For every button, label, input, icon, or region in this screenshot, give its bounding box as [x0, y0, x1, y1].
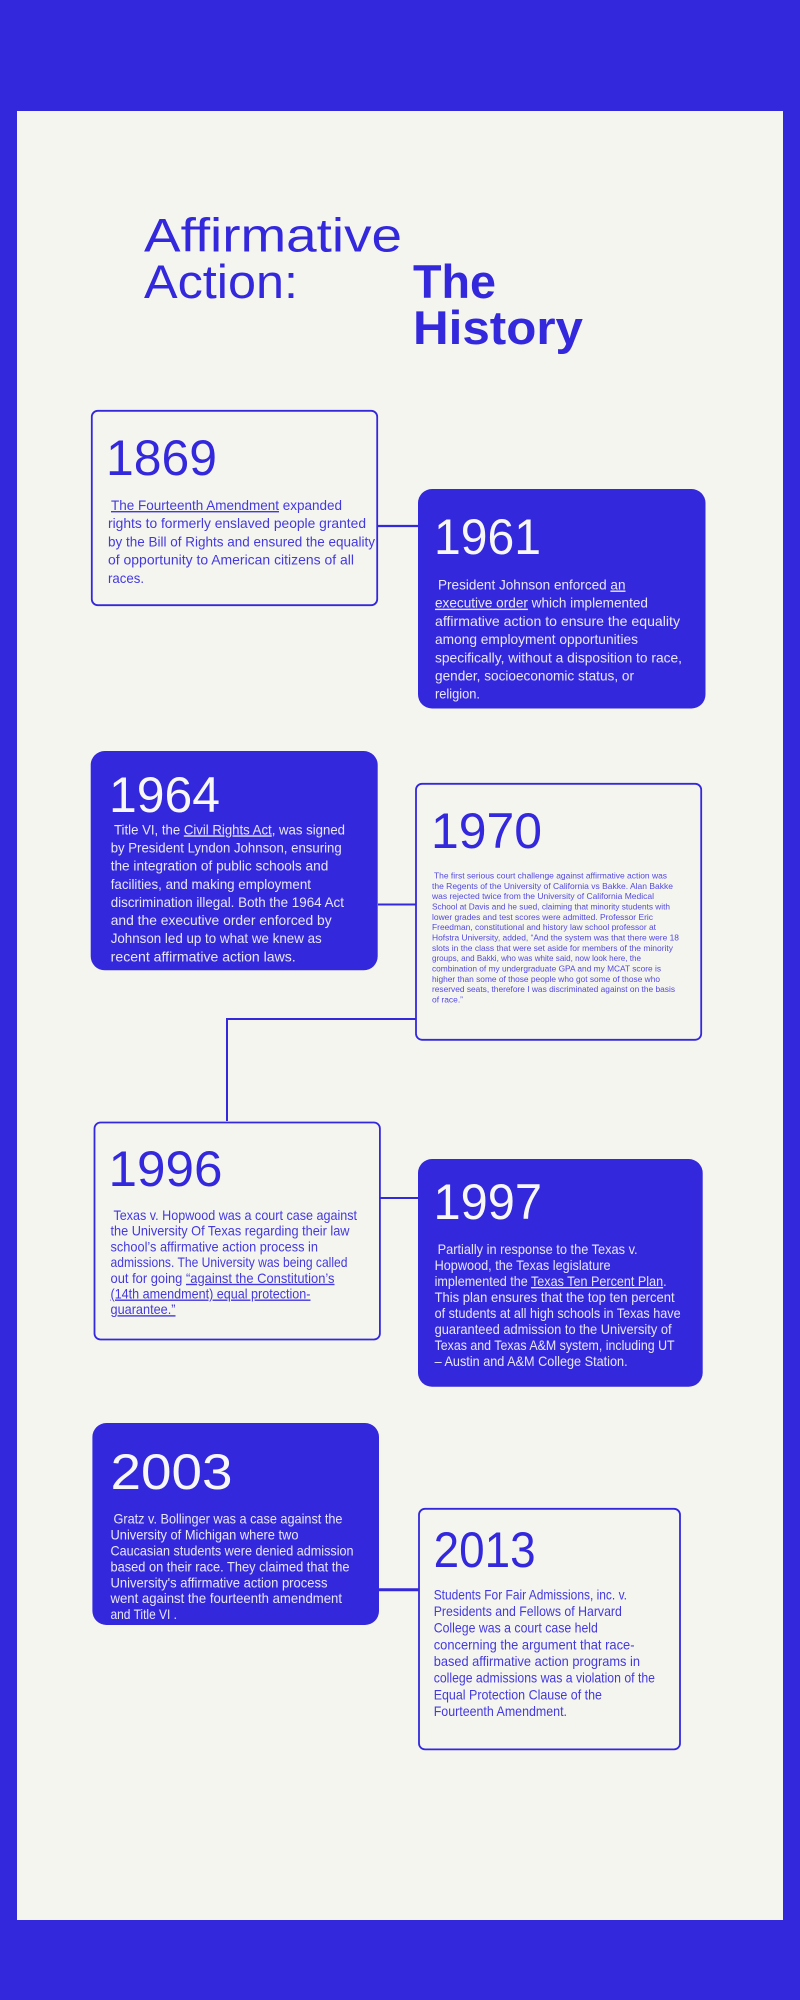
panel: 1961: President Johnson enforced an — [438, 576, 626, 592]
panel: 2003: Gratz v. Bollinger was a case against the — [114, 1511, 343, 1527]
panel: 2003: based on their race. They claimed that the — [110, 1558, 350, 1574]
connector: 1869 to 1961 — [377, 525, 418, 527]
panel: 1997: – Austin and A&M College Station. — [435, 1353, 628, 1369]
panel: 2003: University's affirmative action process — [110, 1574, 328, 1590]
panel: 1970: groups, and Bakki, who was white said, now look here, the — [432, 953, 641, 963]
panel: 1996: Texas v. Hopwood was a court case against — [114, 1207, 357, 1223]
panel: 2003: went against the fourteenth amendment — [110, 1590, 342, 1606]
panel: 1970: Hofstra University, added, “And the system was that there were 18 — [432, 932, 679, 942]
panel: 1997: Texas and Texas A&M system, including UT — [435, 1337, 675, 1353]
panel: 1964: facilities, and making employment — [111, 876, 311, 892]
panel: 1997: Hopwood, the Texas legislature — [435, 1257, 611, 1273]
panel: 1996: the University Of Texas regarding their law — [110, 1223, 350, 1239]
panel: 1970: School at Davis and he sued, claiming that minority students with — [432, 902, 670, 912]
panel: 1970: of race.” — [432, 994, 463, 1004]
panel: 1996 — [94, 1122, 380, 1340]
panel: 1964: Johnson led up to what we knew as — [111, 930, 322, 946]
panel: 2013: Equal Protection Clause of the — [434, 1686, 602, 1702]
connector: 1964 to 1970 — [378, 904, 416, 906]
panel: 1964 — [91, 751, 378, 970]
panel: 1970: the Regents of the University of California vs Bakke. Alan Bakke — [432, 881, 673, 891]
panel: 1970: The first serious court challenge against affirmative action was — [434, 870, 667, 880]
panel: 1869: 1869 — [106, 430, 217, 486]
panel: 1869: rights to formerly enslaved people granted — [108, 515, 366, 531]
panel: 1869: of opportunity to American citizens of all — [108, 552, 354, 568]
panel: 1996: admissions. The University was being called — [110, 1254, 348, 1270]
panel: 1964: discrimination illegal. Both the 1964 Act — [111, 894, 344, 910]
panel: 1996: (14th amendment) equal protection- — [110, 1286, 311, 1302]
panel: 1961 — [418, 489, 706, 708]
panel: 2013: concerning the argument that race- — [434, 1636, 635, 1652]
panel: 1869: races. — [108, 570, 144, 586]
panel: 1964: and the executive order enforced by — [111, 912, 332, 928]
connector: 2003 to 2013 — [379, 1588, 419, 1591]
connector: 1970 to 1996 — [227, 1019, 416, 1121]
connector: 1996 to 1997 — [380, 1197, 418, 1199]
panel: 1970: Freedman, constitutional and history law school professor at — [432, 922, 657, 932]
panel: 1964: by President Lyndon Johnson, ensuring — [111, 840, 342, 856]
panel: 1869 — [92, 411, 377, 605]
panel: 2013: college admissions was a violation of the — [434, 1670, 655, 1686]
title: Affirmative — [144, 208, 402, 262]
panel: 2013: Presidents and Fellows of Harvard — [434, 1603, 622, 1619]
panel: 1997: Partially in response to the Texas v. — [438, 1241, 638, 1257]
panel: 2003: Caucasian students were denied admission — [110, 1542, 354, 1558]
panel: 1997: guaranteed admission to the University of — [435, 1321, 672, 1337]
panel: 1970: lower grades and test scores were admitted. Professor Eric — [432, 912, 654, 922]
panel: 2013: Fourteenth Amendment. — [434, 1703, 567, 1719]
panel: 1997 — [418, 1159, 703, 1387]
panel: 2013: 2013 — [434, 1522, 536, 1578]
panel: 1961: specifically, without a disposition to race, — [435, 649, 682, 665]
title: The — [413, 255, 496, 308]
title: Action: — [144, 255, 298, 308]
panel: 1996: guarantee.” — [110, 1301, 176, 1317]
panel: 1970: combination of my undergraduate GPA and my MCAT score is — [432, 964, 661, 974]
panel: 1961: among employment opportunities — [435, 631, 638, 647]
panel: 1970: 1970 — [431, 803, 542, 859]
title: History — [413, 301, 583, 354]
panel: 1970: higher than some of those people who got some of those who — [432, 974, 660, 984]
panel: 1964: the integration of public schools and — [111, 858, 328, 874]
panel: 1970: slots in the class that were set aside for members of the minority — [432, 943, 674, 953]
panel: 1996: school’s affirmative action process in — [110, 1238, 318, 1254]
panel: 2013: Students For Fair Admissions, inc. v. — [434, 1586, 627, 1602]
panel: 2013 — [419, 1509, 680, 1749]
panel: 1970: was rejected twice from the University of California Medical — [431, 891, 654, 901]
panel: 1961: executive order which implemented — [435, 595, 648, 611]
panel: 1964: recent affirmative action laws. — [111, 948, 296, 964]
panel: 1961: affirmative action to ensure the equality — [435, 613, 680, 629]
panel: 1961: gender, socioeconomic status, or — [435, 668, 634, 684]
panel: 1964: Title VI, the Civil Rights Act, was signed — [114, 821, 345, 837]
panel: 1961: religion. — [435, 686, 480, 702]
panel: 1869: The Fourteenth Amendment expanded — [111, 497, 342, 513]
panel: 1996: out for going “against the Constitution’s — [110, 1270, 334, 1286]
panel: 1869: by the Bill of Rights and ensured the equality — [108, 533, 375, 549]
panel: 2013: based affirmative action programs in — [434, 1653, 640, 1669]
panel: 1970 — [416, 784, 701, 1040]
panel: 1964: 1964 — [109, 767, 220, 823]
panel: 1997: 1997 — [434, 1174, 542, 1230]
panel: 2003: 2003 — [110, 1444, 232, 1500]
panel: 1997: of students at all high schools in Texas have — [435, 1305, 681, 1321]
panel: 1996: 1996 — [108, 1141, 222, 1197]
panel: 2003: and Title VI . — [110, 1606, 177, 1622]
panel: 2003 — [92, 1423, 379, 1625]
panel: 1961: 1961 — [434, 509, 541, 565]
panel: 1970: reserved seats, therefore I was discriminated against on the basis — [432, 984, 675, 994]
panel: 1997: implemented the Texas Ten Percent Plan. — [435, 1273, 667, 1289]
title — [144, 208, 583, 354]
panel: 2003: University of Michigan where two — [110, 1527, 299, 1543]
panel: 2013: College was a court case held — [434, 1620, 598, 1636]
panel: 1997: This plan ensures that the top ten percent — [435, 1289, 675, 1305]
